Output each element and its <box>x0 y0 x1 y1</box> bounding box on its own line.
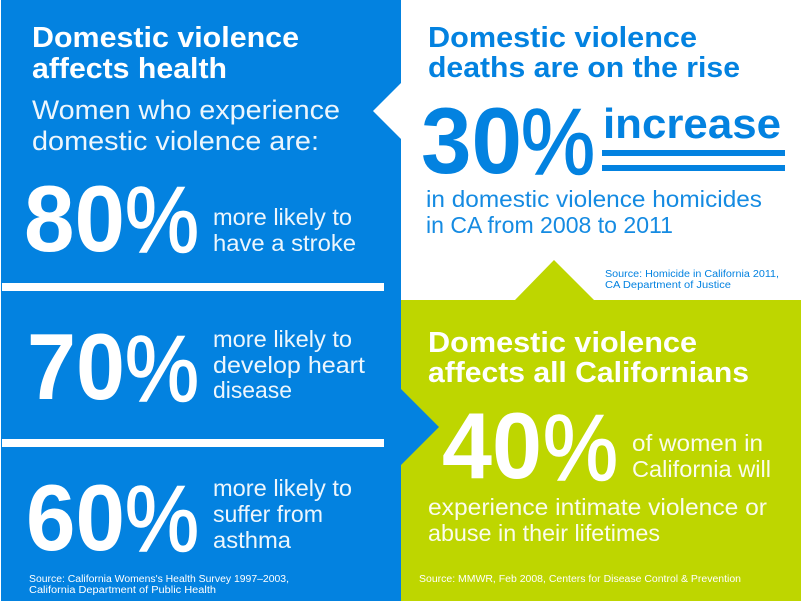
heading: deaths on the rise <box>428 22 740 84</box>
heading: affects health: Domestic violence <box>32 22 299 54</box>
heading: affects health <box>32 22 299 85</box>
stat: 70 percent heart disease: develop heart <box>213 352 366 378</box>
heading: deaths on the rise: Domestic violence <box>428 22 697 54</box>
stat: 80 percent stroke: more likely to <box>213 204 352 230</box>
stat: 70 percent heart disease: % <box>125 316 199 421</box>
arrow: green triangle pointing up <box>515 260 594 300</box>
stat: 60 percent asthma: % <box>125 466 199 571</box>
panel: domestic violence affects health <box>1 0 401 601</box>
heading: deaths on the rise: deaths are on the rise <box>428 52 740 84</box>
heading: all Californians: Domestic violence <box>428 327 697 359</box>
stat: 40 percent: % <box>543 395 618 500</box>
arrow: blue triangle pointing right <box>401 389 439 465</box>
source: homicide report <box>605 269 779 291</box>
heading: affects health: affects health <box>32 53 227 85</box>
panel: affects all Californians <box>401 260 801 601</box>
stat: 30 percent increase: 30 <box>421 88 522 193</box>
intro text <box>32 95 340 156</box>
divider bar one <box>2 283 384 291</box>
stat: 60 percent asthma: 60 <box>26 465 125 570</box>
intro text: Women who experience <box>32 95 340 125</box>
stat: 60 percent asthma: more likely to <box>213 475 352 501</box>
stat: 40 percent: 40 <box>442 393 542 498</box>
stat: 60 percent asthma: suffer from <box>213 501 323 527</box>
stat: 60 percent asthma <box>26 465 352 571</box>
stat: 30 percent increase: increase <box>603 100 781 147</box>
body text: intimate violence: experience intimate violence or <box>428 494 767 520</box>
stat: 80 percent stroke <box>24 166 356 272</box>
stat: 80 percent stroke: 80 <box>24 166 125 271</box>
intro text: domestic violence are: <box>32 126 319 156</box>
stat: 40 percent: of women in <box>632 430 763 456</box>
panel: deaths on the rise <box>373 0 801 300</box>
source: homicide report: CA Department of Justice <box>605 280 731 291</box>
source: health survey <box>29 574 289 596</box>
stat: 40 percent <box>442 393 771 500</box>
body text: intimate violence: abuse in their lifetimes <box>428 520 660 546</box>
divider bar two <box>2 439 384 447</box>
stat: 80 percent stroke: % <box>125 167 199 272</box>
stat: 30 percent increase <box>421 88 785 194</box>
body text: homicides: in domestic violence homicides <box>426 186 762 212</box>
stat: 70 percent heart disease: more likely to <box>213 326 352 352</box>
source: health survey: Source: California Womens's Health Survey 1997–2003, <box>29 574 289 585</box>
body text: homicides <box>426 186 762 238</box>
heading: all Californians <box>428 327 749 389</box>
stat: 60 percent asthma: asthma <box>213 527 291 553</box>
stat: 70 percent heart disease: 70 <box>27 314 125 419</box>
source: health survey: California Department of Public Health <box>29 585 216 596</box>
arrow: white notch pointing left <box>373 83 401 139</box>
source: MMWR: Source: MMWR, Feb 2008, Centers for Disease Control & Prevention <box>419 574 741 585</box>
stat: 80 percent stroke: have a stroke <box>213 230 356 256</box>
stat: 30 percent increase: % <box>521 89 595 194</box>
heading: all Californians: affects all Californians <box>428 357 749 389</box>
stat: 40 percent: California will <box>632 456 771 482</box>
source: homicide report: Source: Homicide in California 2011, <box>605 269 779 280</box>
body text: intimate violence <box>428 494 767 546</box>
stat: 70 percent heart disease: disease <box>213 377 292 403</box>
body text: homicides: in CA from 2008 to 2011 <box>426 212 673 238</box>
stat: 70 percent heart disease <box>27 314 366 421</box>
